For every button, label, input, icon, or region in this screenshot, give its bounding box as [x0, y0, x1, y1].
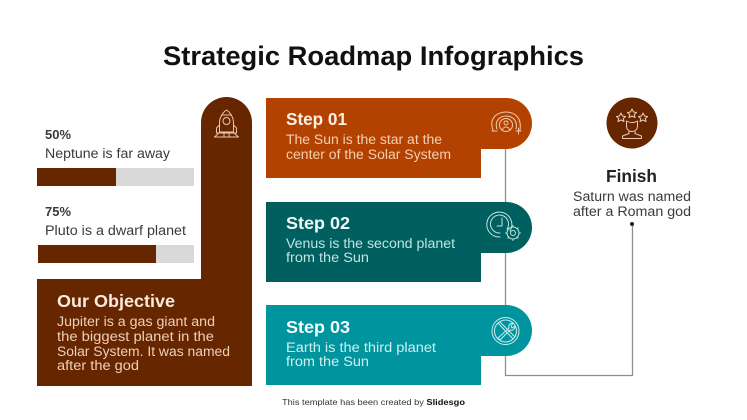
finish text — [573, 189, 691, 219]
icon: gauge with person — [492, 112, 521, 134]
panel: our objective — [37, 97, 252, 386]
objective text — [57, 314, 230, 373]
progress item: Neptune 50%: 50% — [45, 128, 71, 142]
step 03 text — [286, 340, 436, 369]
step 02 heading: Step 02 — [286, 213, 350, 233]
objective text: the biggest planet in the — [57, 329, 214, 344]
panel: step 02 — [266, 202, 532, 282]
icon: clock and gear — [487, 212, 520, 240]
progress item: Pluto 75% — [38, 205, 194, 263]
objective heading: Our Objective — [57, 291, 175, 311]
connector line — [506, 149, 632, 376]
progress item: Neptune 50%: Neptune is far away — [45, 146, 170, 161]
finish text: Saturn was named — [573, 189, 691, 204]
step 03 heading: Step 03 — [286, 317, 350, 337]
step 01 text: The Sun is the star at the — [286, 132, 442, 147]
step 03 text: from the Sun — [286, 354, 369, 369]
icon: finish badge — [606, 98, 658, 148]
footer credit: This template has been created by Slidesgo — [282, 397, 465, 407]
step 02 text: Venus is the second planet — [286, 236, 455, 251]
icon: crossed tools — [492, 318, 519, 344]
connector end dot — [630, 222, 634, 226]
panel: step 01 — [266, 98, 532, 178]
objective text: Jupiter is a gas giant and — [57, 314, 215, 329]
step 01 heading: Step 01 — [286, 109, 347, 129]
step 01 text — [286, 132, 451, 162]
step 02 text — [286, 236, 455, 265]
finish text: after a Roman god — [573, 204, 691, 219]
objective text: Solar System. It was named — [57, 344, 230, 359]
title: Strategic Roadmap Infographics — [163, 41, 584, 71]
step 01 text: center of the Solar System — [286, 147, 451, 162]
finish heading: Finish — [606, 166, 657, 186]
icon: rocket — [214, 110, 238, 137]
objective text: after the god — [57, 358, 139, 373]
progress item: Pluto 75%: 75% — [45, 205, 71, 219]
progress item: Pluto 75%: Pluto is a dwarf planet — [45, 223, 186, 238]
progress item: Neptune 50% — [37, 128, 194, 186]
step 03 text: Earth is the third planet — [286, 340, 436, 355]
step 02 text: from the Sun — [286, 250, 369, 265]
panel: step 03 — [266, 305, 532, 385]
